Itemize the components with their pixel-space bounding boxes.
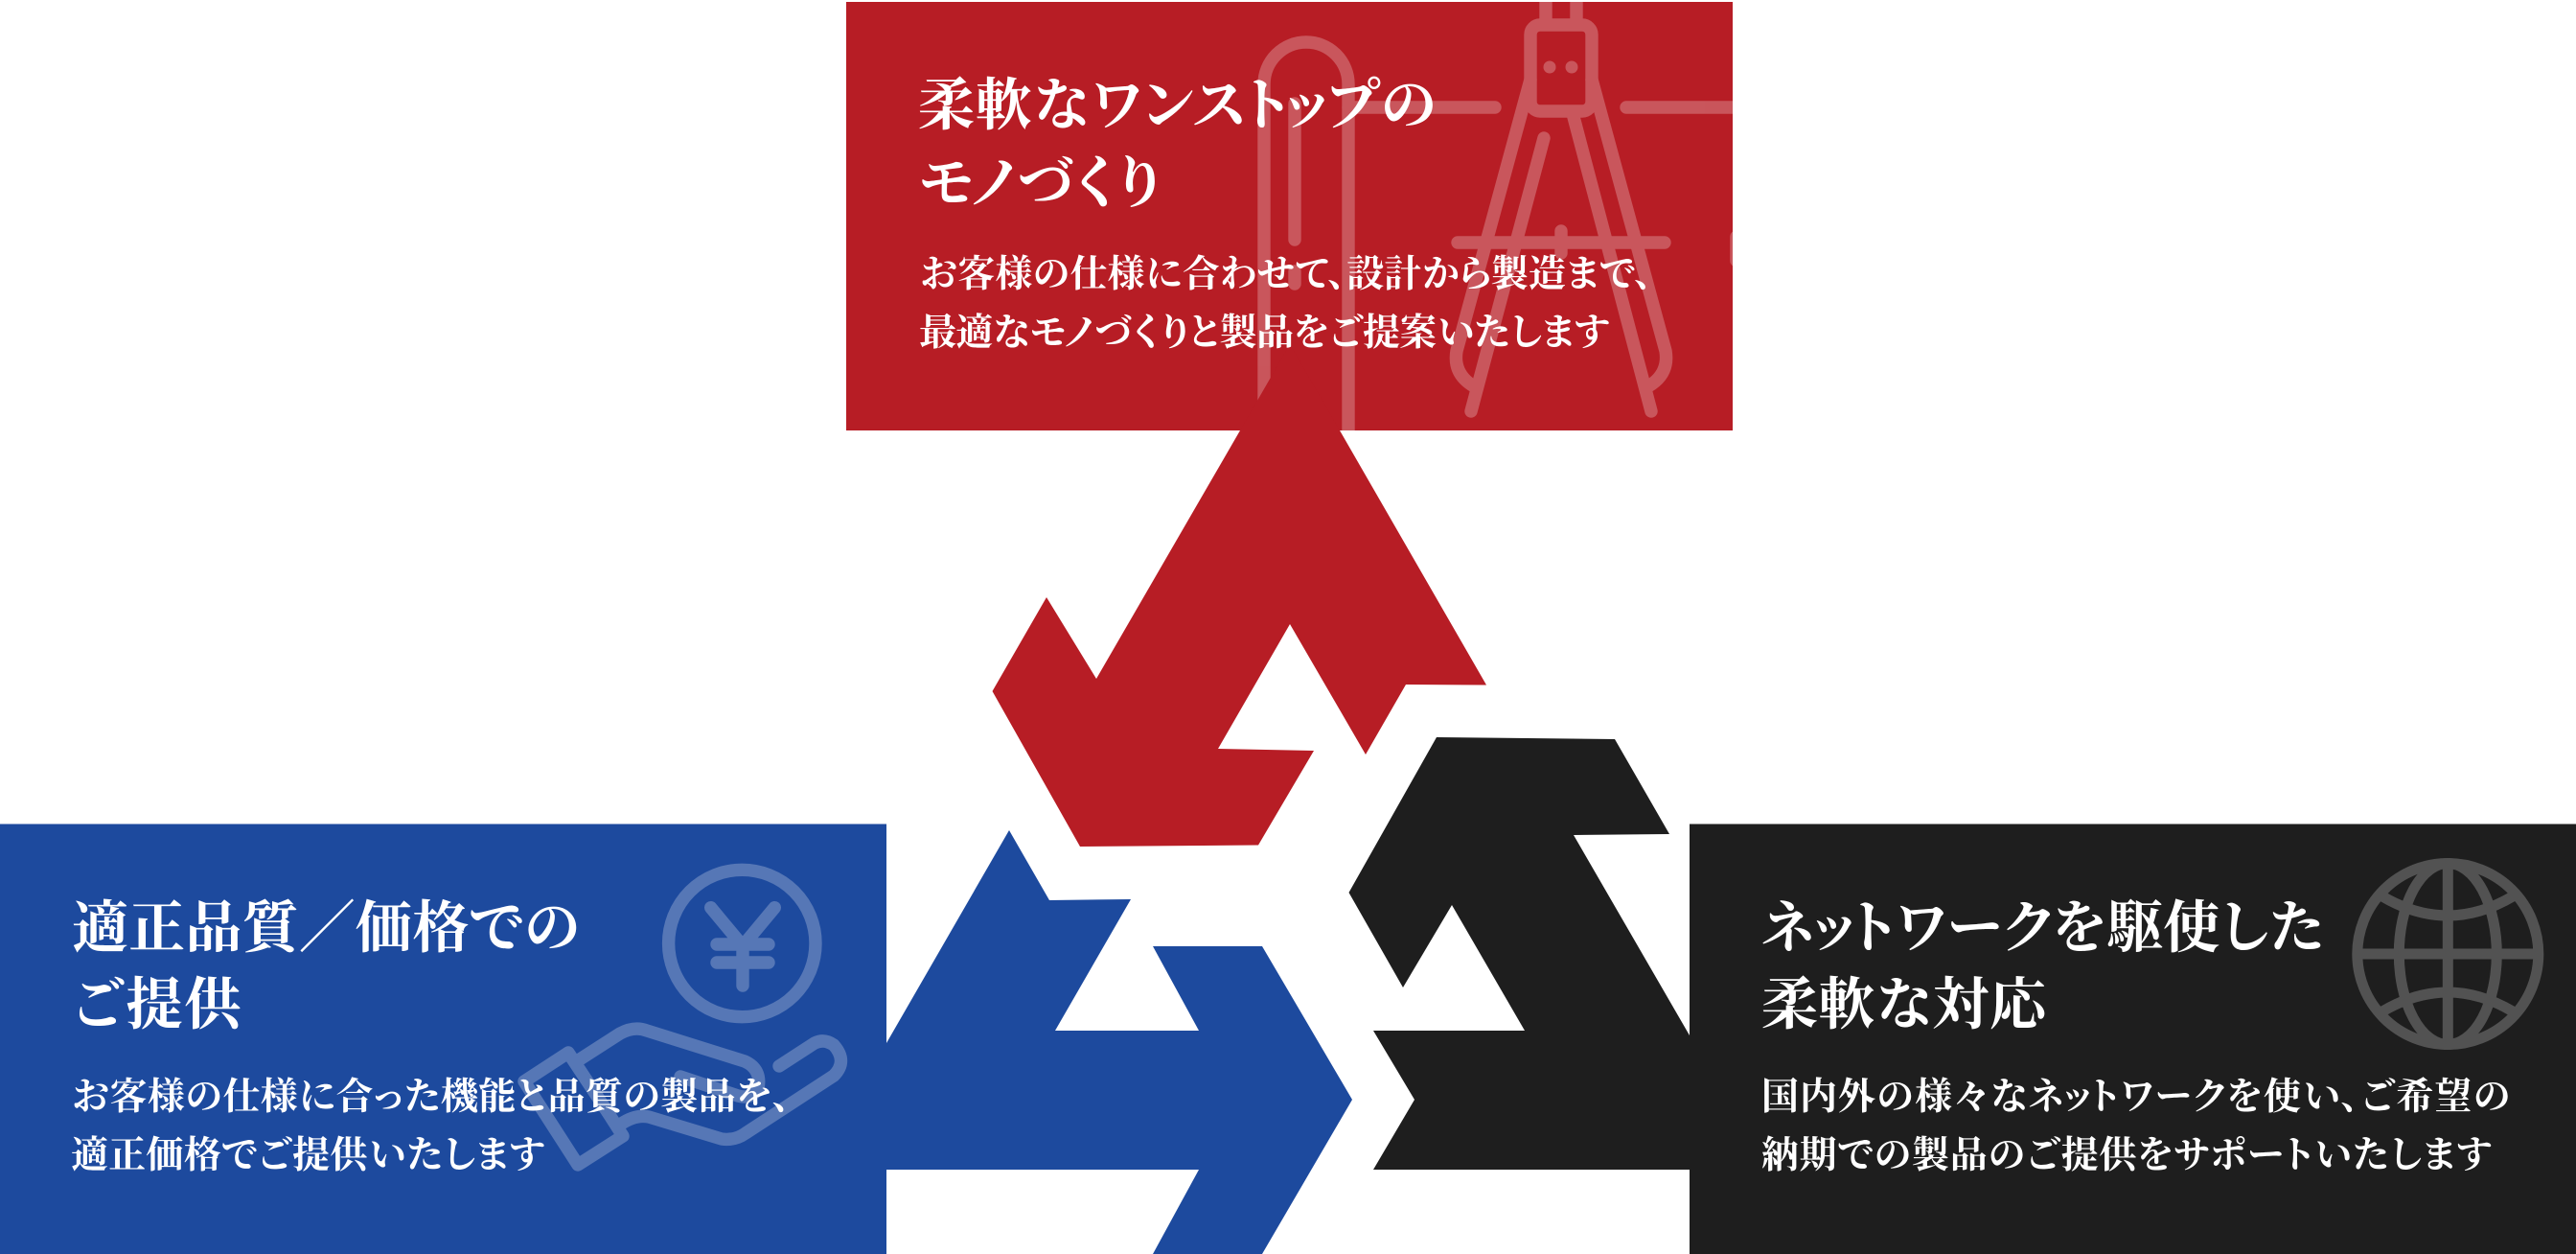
- arrow: blue, cycle segment pointing right: [886, 830, 1352, 1254]
- heading: blue panel: ご提供: [72, 973, 244, 1036]
- icon: globe: [2358, 863, 2539, 1045]
- icon: clip and drafting compass: [1264, 0, 1754, 441]
- heading: blue panel: 適正品質／価格での: [72, 896, 581, 960]
- icon: hand holding yen coin: [524, 870, 841, 1165]
- arrow: black, cycle segment pointing up-left: [1349, 737, 1690, 1170]
- text: blue panel description: 適正価格でご提供いたします: [71, 1135, 544, 1176]
- heading: black panel: ネットワークを駆使した: [1761, 896, 2324, 960]
- panel: fair quality and price (blue): [0, 824, 886, 1254]
- text: blue panel description: お客様の仕様に合った機能と品質の製品を、: [71, 1077, 792, 1118]
- heading: black panel: 柔軟な対応: [1761, 973, 2052, 1036]
- text: black panel description: 国内外の様々なネットワークを使い、ご希望の: [1761, 1077, 2512, 1118]
- arrow: red, cycle segment pointing down-left: [993, 344, 1486, 847]
- text: black panel description: 納期での製品のご提供をサポートいたします: [1761, 1135, 2492, 1176]
- panel: flexible network response (black): [1690, 824, 2576, 1254]
- panel: flexible one-stop manufacturing (red): [846, 0, 1754, 441]
- heading: red panel: 柔軟なワンストップの: [918, 74, 1438, 137]
- text: red panel description: お客様の仕様に合わせて、設計から製造まで、: [919, 254, 1653, 295]
- heading: red panel: モノづくり: [918, 151, 1161, 215]
- text: red panel description: 最適なモノづくりと製品をご提案いたします: [919, 313, 1610, 354]
